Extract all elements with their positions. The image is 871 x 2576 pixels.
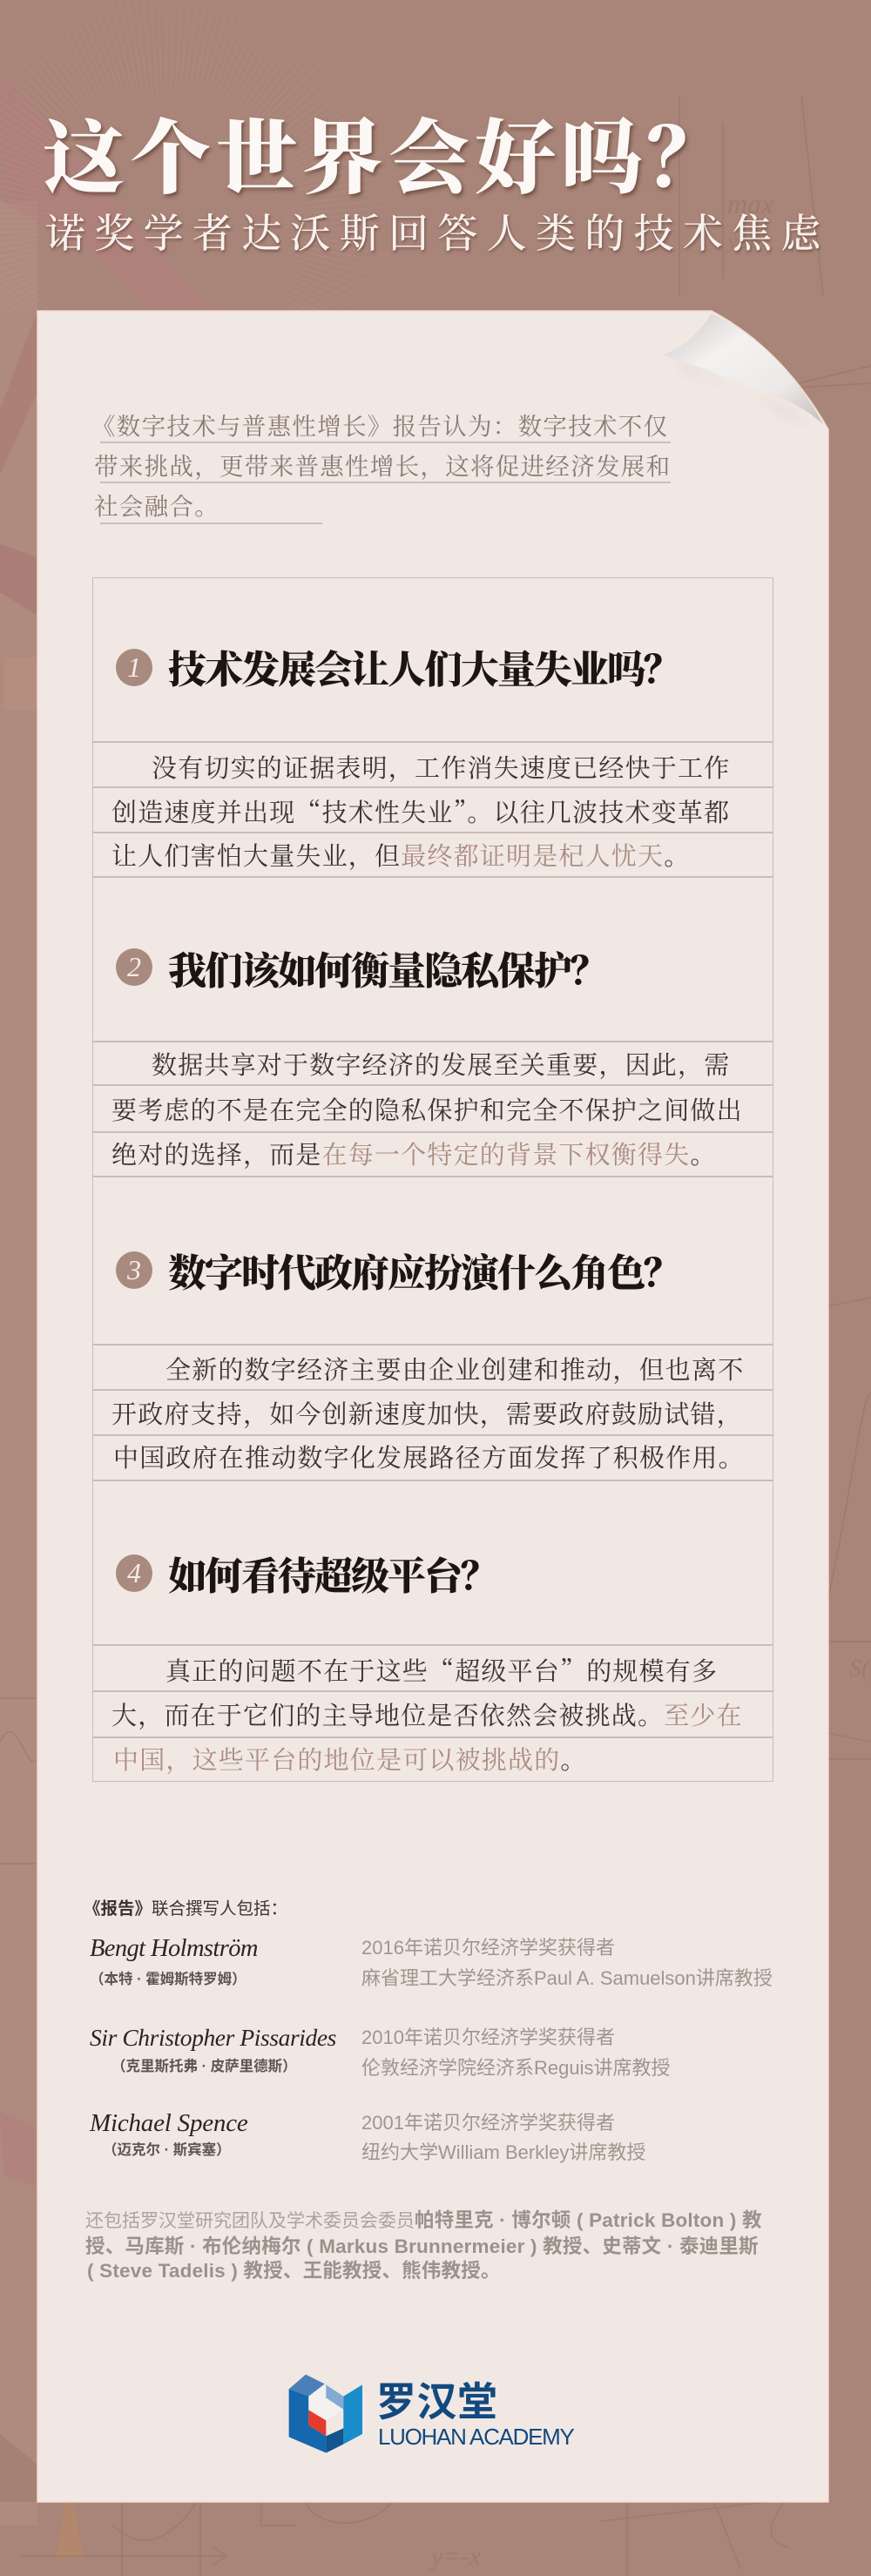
body line 1: 真正的问题不在于这些“超级平台”的规模有多 xyxy=(165,1652,718,1688)
number badge 3: 3 xyxy=(127,1254,141,1285)
body line 3: 中国，这些平台的地位是可以被挑战的。 xyxy=(113,1741,587,1777)
title line: 2001年诺贝尔经济学奖获得者 xyxy=(361,2112,615,2134)
number badge 3 xyxy=(116,1251,152,1289)
signature: Sir Christopher Pissarides xyxy=(90,2024,336,2051)
logo: Luohan Academy xyxy=(289,2374,575,2453)
position line: 纽约大学William Berkley讲席教授 xyxy=(361,2141,645,2163)
title line: 2016年诺贝尔经济学奖获得者 xyxy=(361,1937,615,1959)
number badge 2: 2 xyxy=(127,951,141,982)
heading 2: 我们该如何衡量隐私保护？ xyxy=(168,940,607,995)
intro line 2: 带来挑战，更带来普惠性增长，这将促进经济发展和 xyxy=(94,447,671,482)
background decoration: ribbons and math scribbles: y=|x|+h(x) xyxy=(429,414,523,436)
icon: curled paper corner xyxy=(664,314,823,424)
section 2 xyxy=(93,940,773,1177)
line 3: ( Steve Tadelis ) 教授、王能教授、熊伟教授。 xyxy=(87,2260,501,2282)
line 1: 还包括罗汉堂研究团队及学术委员会委员帕特里克 · 博尔顿 ( Patrick Bolton ) 教 xyxy=(85,2209,762,2231)
body line 1: 数据共享对于数字经济的发展至关重要，因此，需 xyxy=(152,1046,730,1082)
number badge 4: 4 xyxy=(127,1557,141,1588)
subtitle: 诺奖学者达沃斯回答人类的技术焦虑 xyxy=(45,202,830,260)
body line 3: 绝对的选择，而是在每一个特定的背景下权衡得失。 xyxy=(111,1136,717,1171)
Chinese name: （克里斯托弗 · 皮萨里德斯） xyxy=(111,2059,297,2074)
body line 3: 中国政府在推动数字化发展路径方面发挥了积极作用。 xyxy=(113,1439,745,1474)
number badge 2 xyxy=(116,948,152,986)
intro line 1: 《数字技术与普惠性增长》报告认为：数字技术不仅 xyxy=(91,407,668,442)
signature: Michael Spence xyxy=(90,2109,248,2137)
signature: Bengt Holmström xyxy=(90,1935,258,1962)
Chinese wordmark: 罗汉堂 xyxy=(376,2379,498,2424)
heading 3: 数字时代政府应扮演什么角色？ xyxy=(168,1242,680,1298)
title: 这个世界会好吗？ xyxy=(44,93,733,210)
body line 2: 开政府支持，如今创新速度加快，需要政府鼓励试错， xyxy=(111,1395,743,1431)
co-authors heading: 《报告》联合撰写人包括： xyxy=(84,1899,287,1919)
body line 2: 创造速度并出现“技术性失业”。以往几波技术变革都 xyxy=(111,793,730,829)
section 3 xyxy=(93,1242,773,1481)
author: Bengt Holmström xyxy=(90,1935,773,1989)
number badge 4 xyxy=(116,1554,152,1592)
title line: 2010年诺贝尔经济学奖获得者 xyxy=(361,2026,615,2048)
Chinese name: （本特 · 霍姆斯特罗姆） xyxy=(90,1972,246,1987)
author: Michael Spence xyxy=(89,2109,645,2163)
English wordmark: LUOHAN ACADEMY xyxy=(378,2424,574,2450)
intro line 3: 社会融合。 xyxy=(94,487,219,522)
heading 4: 如何看待超级平台？ xyxy=(168,1545,497,1601)
number badge 1: 1 xyxy=(127,651,141,683)
table frame xyxy=(92,577,773,1782)
body line 2: 大，而在于它们的主导地位是否依然会被挑战。至少在 xyxy=(111,1696,743,1732)
body line 3: 让人们害怕大量失业，但最终都证明是杞人忧天。 xyxy=(111,837,690,873)
background: radial fan of fine lines xyxy=(0,0,540,311)
line 2: 授、马库斯 · 布伦纳梅尔 ( Markus Brunnermeier ) 教授、史蒂文 · 泰迪里斯 xyxy=(85,2235,759,2257)
number badge 1 xyxy=(116,649,152,686)
body line 1: 全新的数字经济主要由企业创建和推动，但也离不 xyxy=(165,1351,744,1386)
icon: hexagon cube mark xyxy=(289,2374,362,2453)
heading 1: 技术发展会让人们大量失业吗？ xyxy=(168,638,680,694)
other contributors paragraph xyxy=(85,2209,762,2282)
position line: 麻省理工大学经济系Paul A. Samuelson讲席教授 xyxy=(361,1967,773,1989)
background decoration: ribbons and math scribbles: S( xyxy=(849,1656,871,1682)
background decoration: ribbons and math scribbles: y≥0 xyxy=(725,228,761,253)
body line 2: 要考虑的不是在完全的隐私保护和完全不保护之间做出 xyxy=(111,1091,743,1127)
author: Christopher Pissarides xyxy=(90,2024,670,2079)
section 1 xyxy=(93,638,773,878)
section 4 xyxy=(93,1545,773,1777)
intro paragraph xyxy=(91,407,671,524)
position line: 伦敦经济学院经济系Reguis讲席教授 xyxy=(361,2057,670,2079)
background decoration: ribbons and math scribbles: max xyxy=(727,188,773,219)
background decoration: ribbons and math scribbles: y=-x xyxy=(429,2542,482,2571)
Chinese name: （迈克尔 · 斯宾塞） xyxy=(103,2142,231,2158)
body line 1: 没有切实的证据表明，工作消失速度已经快于工作 xyxy=(152,749,730,785)
